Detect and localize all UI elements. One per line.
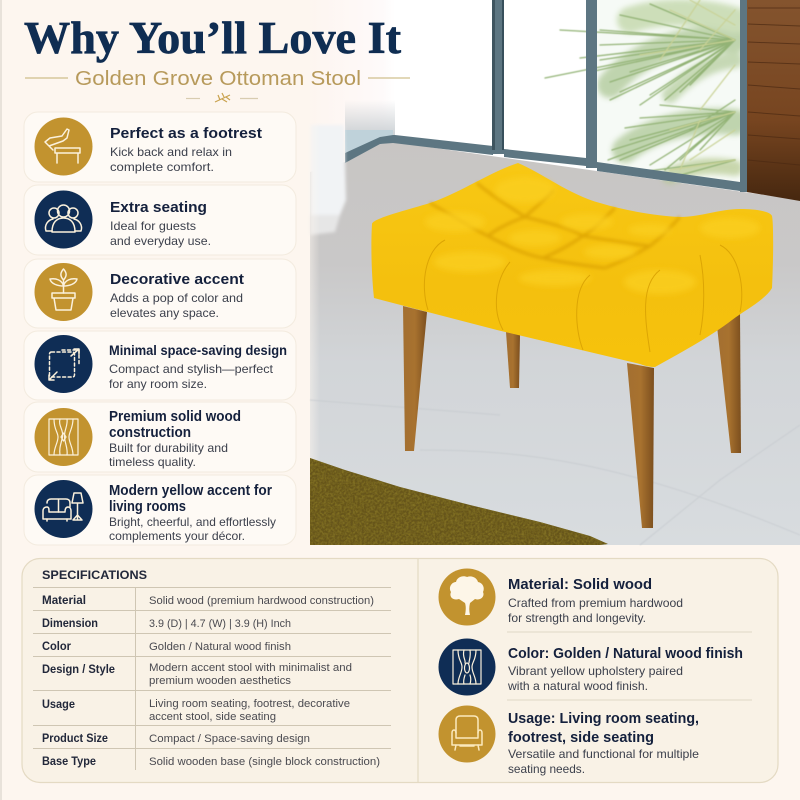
specifications table: 3.9 (D) | 4.7 (W) | 3.9 (H) Inch bbox=[149, 618, 291, 630]
window frames bbox=[345, 0, 747, 192]
icon: sofa and lamp bbox=[34, 480, 92, 538]
highlight: color: Color: Golden / Natural wood finish bbox=[508, 645, 743, 662]
highlight: usage bbox=[438, 706, 699, 776]
card: solid wood: Premium solid wood bbox=[109, 408, 241, 425]
wood wall panel bbox=[747, 0, 800, 201]
highlight: material: Crafted from premium hardwood bbox=[508, 596, 683, 610]
tufted top shading bbox=[430, 183, 680, 268]
icon: armchair bbox=[438, 706, 496, 762]
window panes and wall bbox=[310, 0, 747, 195]
card: living rooms: living rooms bbox=[109, 498, 186, 515]
specifications table: Golden / Natural wood finish bbox=[149, 641, 291, 653]
title: Why You’ll Love It bbox=[24, 13, 401, 63]
card: extra seating: Ideal for guests bbox=[110, 219, 196, 233]
icon: leg on footrest bbox=[34, 118, 92, 176]
card: solid wood: construction bbox=[109, 424, 191, 441]
specifications table: Base Type bbox=[42, 756, 96, 768]
specifications table: Color bbox=[42, 641, 72, 653]
highlight: usage: seating needs. bbox=[508, 762, 585, 776]
card: living rooms: Bright, cheerful, and effortlessly bbox=[109, 515, 276, 529]
panel: feature cards bbox=[24, 112, 296, 545]
card: footrest: Perfect as a footrest bbox=[110, 125, 262, 142]
specifications table: Material bbox=[42, 595, 86, 607]
card: decorative accent: Adds a pop of color and bbox=[110, 291, 243, 305]
rug bbox=[310, 458, 608, 545]
icon: dashed resize square bbox=[34, 335, 92, 393]
highlight: usage: footrest, side seating bbox=[508, 729, 654, 746]
icon: potted plant bbox=[34, 263, 92, 321]
card: footrest bbox=[24, 112, 296, 182]
card: extra seating: Extra seating bbox=[110, 199, 207, 216]
ornament: sprig divider bbox=[186, 93, 258, 102]
card: decorative accent bbox=[24, 259, 296, 328]
icon: wood grain bbox=[34, 408, 92, 466]
highlight: color: Vibrant yellow upholstery paired bbox=[508, 664, 683, 678]
icon: wood grain navy bbox=[438, 638, 496, 696]
card: decorative accent: Decorative accent bbox=[110, 271, 244, 288]
specifications table: Product Size bbox=[42, 733, 108, 745]
highlight: color bbox=[438, 638, 743, 696]
card: footrest: Kick back and relax in bbox=[110, 145, 232, 159]
card: space-saving bbox=[24, 331, 296, 400]
specifications table: Modern accent stool with minimalist and bbox=[149, 662, 352, 674]
card: decorative accent: elevates any space. bbox=[110, 306, 219, 320]
highlight: material bbox=[438, 568, 683, 626]
icon: tree bbox=[438, 568, 496, 626]
front seams bbox=[424, 240, 742, 352]
card: footrest: complete comfort. bbox=[110, 160, 214, 174]
table heading: SPECIFICATIONS bbox=[42, 570, 147, 582]
product photo: yellow tufted ottoman stool in a room bbox=[300, 0, 800, 545]
subtitle with rules: Golden Grove Ottoman Stool bbox=[75, 67, 361, 90]
highlight: color: with a natural wood finish. bbox=[507, 679, 648, 693]
specifications table: Living room seating, footrest, decorative bbox=[149, 698, 350, 710]
highlight: material: Material: Solid wood bbox=[508, 576, 652, 593]
card: extra seating: and everyday use. bbox=[110, 234, 211, 248]
curtain bbox=[310, 125, 346, 235]
card: living rooms: complements your décor. bbox=[109, 529, 245, 543]
card: extra seating bbox=[24, 185, 296, 255]
stool seat bbox=[371, 163, 773, 367]
specifications table: Solid wood (premium hardwood construction) bbox=[149, 595, 374, 607]
highlight: material: for strength and longevity. bbox=[508, 611, 646, 625]
specifications table bbox=[33, 570, 391, 770]
card: space-saving: for any room size. bbox=[109, 377, 207, 391]
card: solid wood: timeless quality. bbox=[109, 455, 196, 469]
card: solid wood bbox=[24, 402, 296, 472]
icon: group of people bbox=[34, 190, 92, 248]
specifications table: premium wooden aesthetics bbox=[149, 675, 292, 687]
card: space-saving: Minimal space-saving design bbox=[109, 342, 287, 358]
card: living rooms: Modern yellow accent for bbox=[109, 482, 272, 499]
palm fronds outside window bbox=[545, 0, 735, 178]
specifications table: Dimension bbox=[42, 618, 98, 630]
panel: specifications and highlights bbox=[22, 558, 778, 782]
highlight: usage: Versatile and functional for multiple bbox=[508, 747, 699, 761]
highlight: usage: Usage: Living room seating, bbox=[508, 710, 699, 727]
specifications table: Compact / Space-saving design bbox=[149, 733, 310, 745]
specifications table: Solid wooden base (single block construction) bbox=[149, 756, 380, 768]
card: space-saving: Compact and stylish—perfect bbox=[109, 362, 274, 376]
specifications table: Usage bbox=[42, 699, 75, 711]
left edge strip bbox=[0, 0, 2, 800]
card: living rooms bbox=[24, 475, 296, 545]
specifications table: Design / Style bbox=[42, 664, 115, 676]
card: solid wood: Built for durability and bbox=[109, 441, 228, 455]
floor shadows and tile joints bbox=[310, 400, 800, 545]
specifications table: accent stool, side seating bbox=[149, 711, 276, 723]
room floor bbox=[310, 142, 800, 545]
left fade into page bbox=[300, 0, 320, 545]
stool legs bbox=[403, 306, 741, 528]
